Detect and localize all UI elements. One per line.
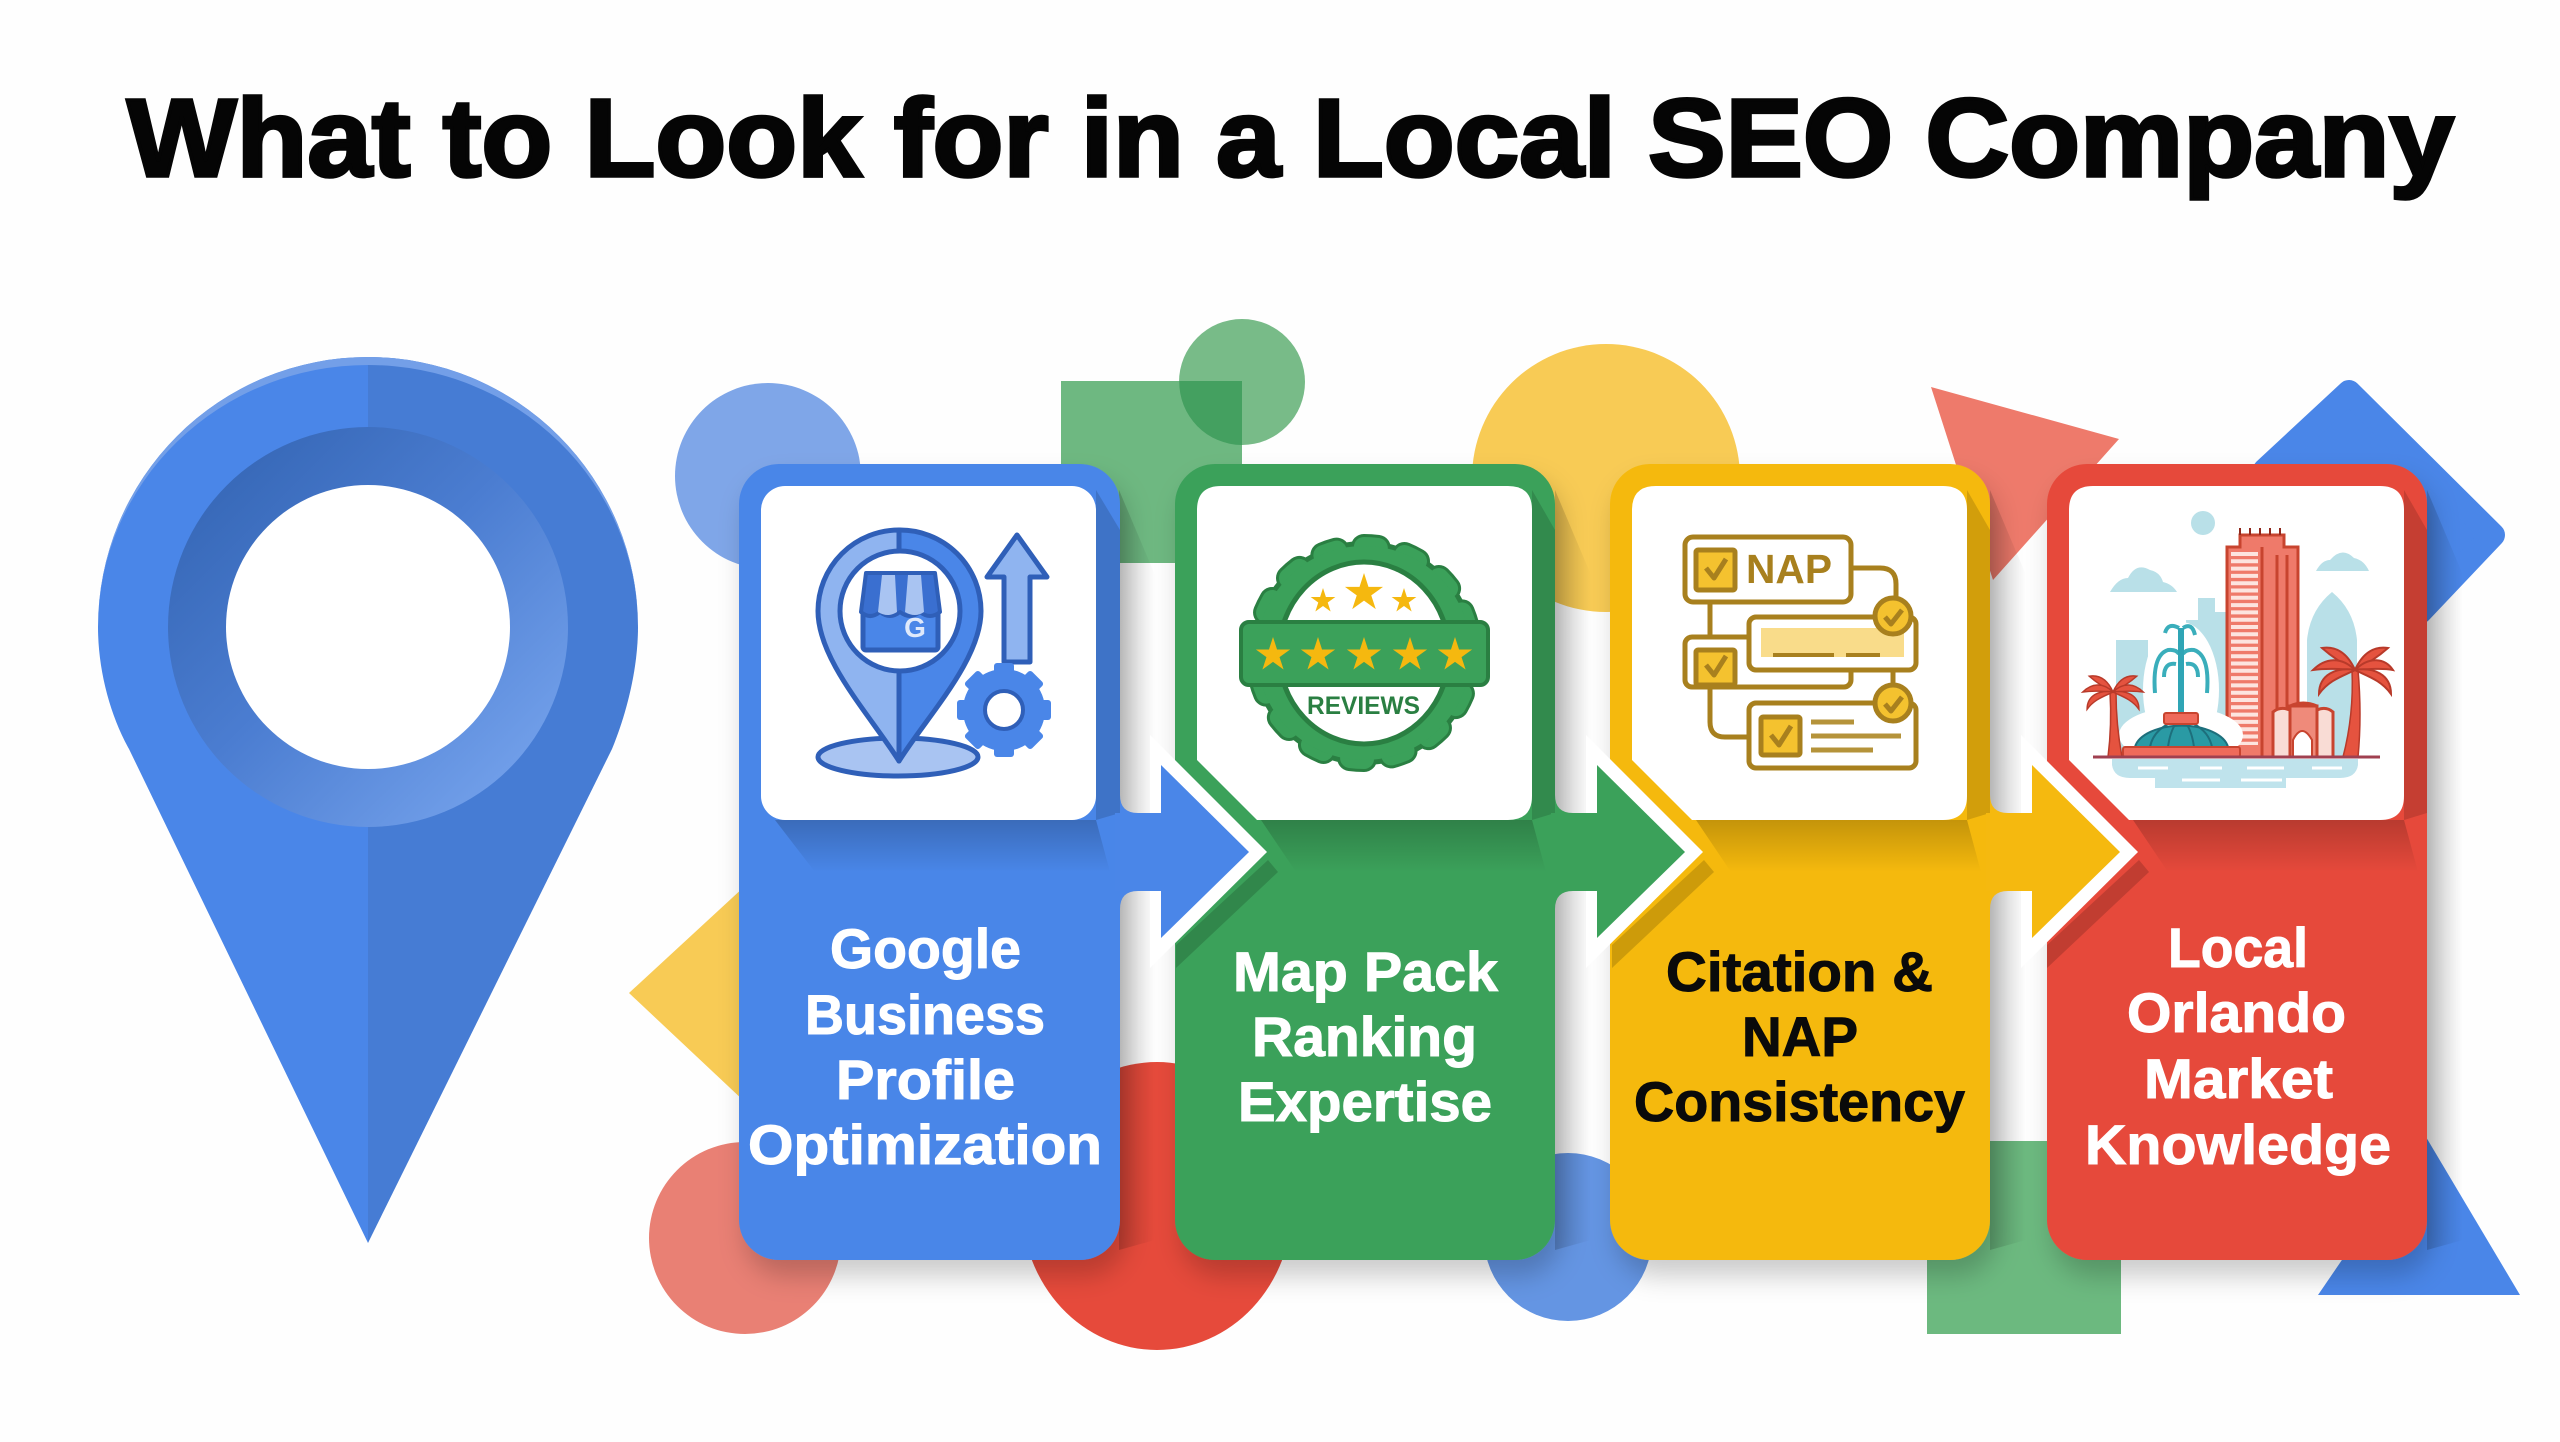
panel: Google Business Profile optimization card [739, 464, 1278, 1260]
icon: Orlando skyline with fountain and palms [2083, 511, 2393, 788]
icon: reviews badge with stars: REVIEWS [1307, 692, 1420, 720]
text: Citation and NAP Consistency [1634, 940, 1965, 1133]
text: Google Business Profile Optimization: Profile [836, 1048, 1015, 1111]
panel: citation and NAP consistency card [1610, 464, 2149, 1260]
text: Map Pack Ranking Expertise: Map Pack [1233, 940, 1499, 1003]
text: Local Orlando Market Knowledge: Local [2168, 916, 2308, 979]
text: Citation and NAP Consistency: Consistency [1634, 1070, 1965, 1133]
title: What to Look for in a Local SEO Company [127, 77, 2454, 200]
text: Google Business Profile Optimization: Business [805, 983, 1045, 1046]
text: Local Orlando Market Knowledge [2085, 916, 2391, 1176]
text: Google Business Profile Optimization: Optimization [748, 1113, 1102, 1176]
text: Citation and NAP Consistency: Citation & [1666, 940, 1933, 1003]
text: Local Orlando Market Knowledge: Knowledge [2085, 1113, 2391, 1176]
text: Local Orlando Market Knowledge: Orlando [2127, 981, 2346, 1044]
panel: local Orlando market knowledge card [2047, 464, 2463, 1260]
icon: large location pin [98, 357, 638, 1243]
icon: NAP citation checklist flow: NAP [1746, 546, 1832, 592]
text: Google Business Profile Optimization: Google [830, 917, 1021, 980]
icon: NAP citation checklist flow [1685, 537, 1916, 768]
text: Google Business Profile Optimization [748, 917, 1102, 1176]
text: Map Pack Ranking Expertise [1233, 940, 1499, 1133]
text: Citation and NAP Consistency: NAP [1742, 1005, 1858, 1068]
icon: GBP pin, storefront, arrow and gear [818, 530, 1051, 776]
panel: map pack ranking expertise card [1175, 464, 1714, 1260]
text: Map Pack Ranking Expertise: Ranking [1252, 1005, 1477, 1068]
icon label: G on storefront: G [904, 612, 926, 643]
background decorative shapes [629, 319, 2520, 1350]
text: Local Orlando Market Knowledge: Market [2144, 1047, 2333, 1110]
text: Map Pack Ranking Expertise: Expertise [1238, 1070, 1492, 1133]
icon: reviews badge with stars [1241, 541, 1488, 765]
